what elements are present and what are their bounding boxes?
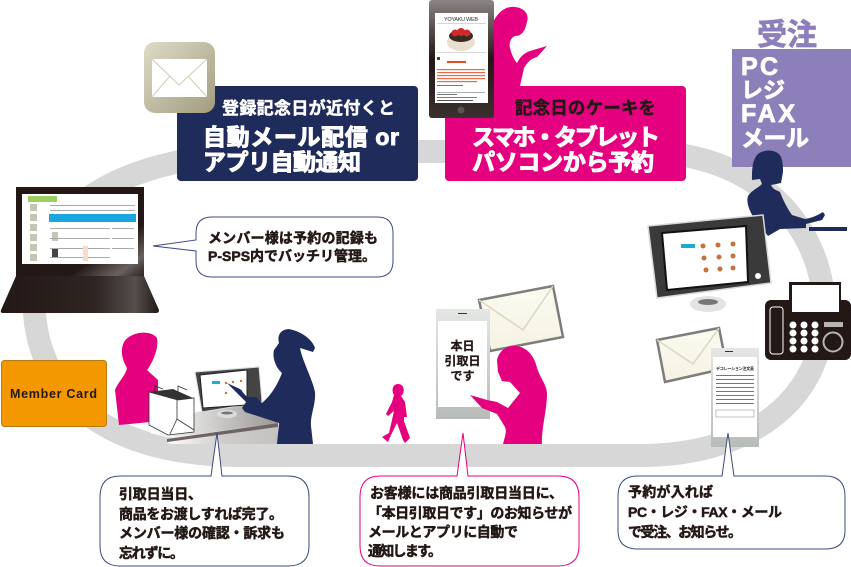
icon: smartphone with cake page: YOYAKU WEB (444, 17, 478, 23)
panel: smartphone reservation: パソコンから予約 (472, 149, 654, 175)
member card: Member Card (10, 387, 97, 401)
panel: auto mail notification: 登録記念日が近付くと (222, 98, 395, 118)
callout: pickup notification: メールとアプリに自動で (368, 524, 518, 540)
icon: gold mail app (144, 42, 215, 113)
silhouette: walking person (382, 384, 410, 443)
panel: order channels: FAX (741, 100, 795, 128)
icon: phone with order form (711, 348, 759, 447)
icon: phone showing pickup day: です (450, 369, 475, 383)
icon: laptop (1, 187, 159, 313)
counter (150, 402, 278, 444)
cycle track (34, 152, 824, 456)
silhouette: staff at keyboard (747, 150, 847, 236)
panel: auto mail notification: 自動メール配信 or (203, 124, 399, 150)
icon: smartphone with cake page (429, 0, 494, 118)
panel: smartphone reservation: スマホ・タブレット (472, 124, 660, 150)
panel: auto mail notification (177, 86, 418, 181)
icon: fax machine (765, 282, 851, 360)
callout: pickup notification (360, 433, 579, 566)
heading: order intake: 受注 (757, 19, 817, 52)
callout: laptop management (153, 217, 393, 277)
callout: handover: メンバー様の確認・訴求も (119, 525, 285, 541)
icon: shopping bag (149, 386, 194, 435)
callout: pickup notification: お客様には商品引取日当日に、 (370, 485, 563, 501)
icon: envelope right (657, 328, 727, 382)
silhouette: woman with phone top (490, 7, 547, 86)
callout: pickup notification: 「本日引取日です」のお知らせが (368, 505, 572, 521)
callout: order received: PC・レジ・FAX・メール (628, 504, 782, 520)
icon: phone showing pickup day: 引取日 (444, 354, 481, 368)
silhouette: chef staff (227, 329, 315, 444)
icon: POS terminal counter (195, 367, 262, 418)
panel: order channels: メール (741, 125, 809, 151)
callout: handover: 商品をお渡しすれば完了。 (119, 506, 283, 522)
panel: order channels: レジ (741, 78, 785, 103)
callout: laptop management: メンバー様は予約の記録も (208, 230, 378, 246)
silhouette: customer at counter (115, 333, 158, 425)
panel: smartphone reservation (445, 86, 686, 181)
silhouette: woman with phone center (470, 346, 547, 444)
callout: handover (100, 433, 309, 566)
icon: phone showing pickup day: 本日 (450, 338, 475, 353)
panel: order channels (732, 49, 851, 167)
icon: envelope center (479, 286, 563, 351)
callout: handover: 引取日当日、 (119, 486, 202, 502)
member card (2, 360, 106, 426)
icon: phone showing pickup day (436, 309, 490, 419)
callout: pickup notification: 通知します。 (368, 543, 442, 559)
callout: handover: 忘れずに。 (119, 545, 184, 561)
icon: phone with order form: デコレーション注文表 (716, 365, 754, 371)
callout: laptop management: P-SPS内でバッチリ管理。 (208, 248, 376, 264)
panel: smartphone reservation: 記念日のケーキを (515, 98, 656, 118)
callout: order received: で受注、お知らせ。 (628, 524, 742, 540)
panel: order channels: PC (741, 53, 778, 81)
callout: order received (618, 433, 845, 549)
callout: order received: 予約が入れば (628, 484, 713, 500)
icon: POS terminal right (648, 215, 771, 312)
panel: auto mail notification: アプリ自動通知 (203, 149, 361, 175)
